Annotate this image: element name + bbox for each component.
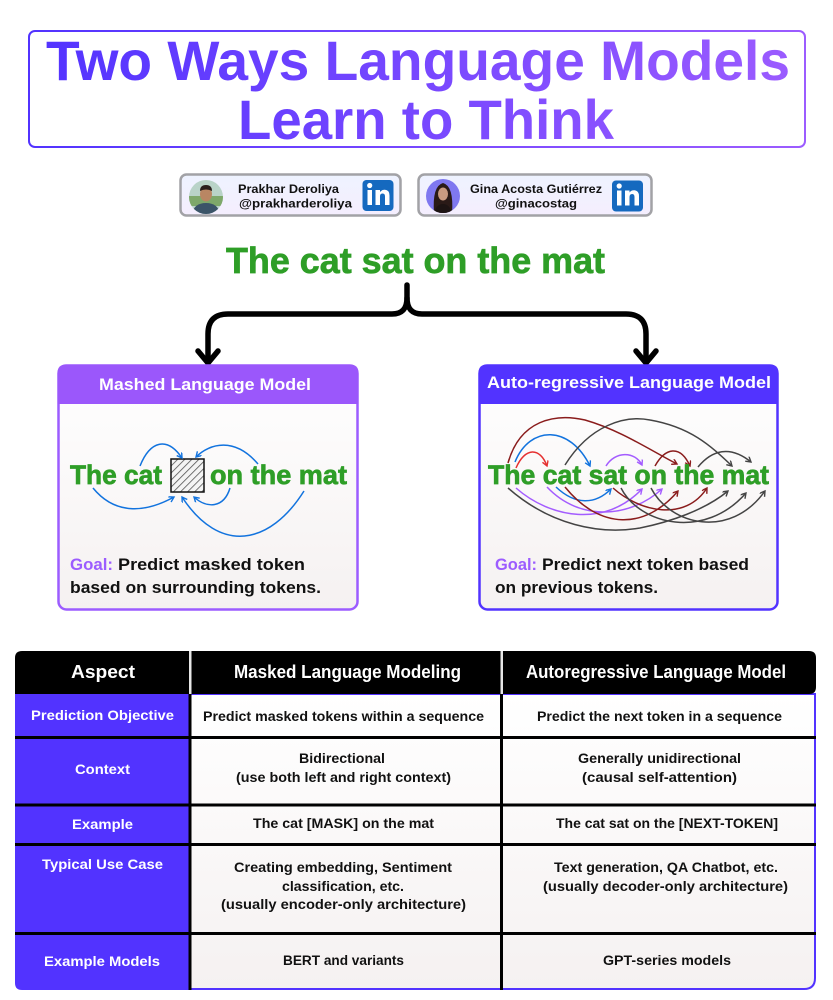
- title: Learn to Think: [238, 88, 615, 151]
- first column fill: [15, 690, 190, 990]
- table header: [15, 651, 816, 694]
- row: context: (causal self-attention): [582, 770, 737, 785]
- row: example models: GPT-series models: [603, 953, 731, 968]
- row: context: Generally unidirectional: [578, 751, 741, 766]
- panel header: [478, 364, 778, 404]
- goal text: Predict next token based: [542, 555, 749, 574]
- goal text: on previous tokens.: [495, 578, 658, 597]
- row: prediction objective: Prediction Objective: [31, 707, 174, 723]
- goal text: [495, 555, 749, 597]
- row: example models: [44, 953, 731, 969]
- panel header: [58, 364, 358, 404]
- row: prediction objective: Predict masked tokens within a sequence: [203, 709, 485, 724]
- row: typical use case: classification, etc.: [282, 879, 404, 894]
- row: example: The cat [MASK] on the mat: [253, 816, 435, 831]
- sentence arcs behind: [508, 418, 765, 530]
- goal text: Predict masked token: [118, 555, 305, 574]
- masked sentence: The cat: [70, 460, 162, 490]
- row: example: [72, 816, 778, 832]
- row: example models: BERT and variants: [283, 953, 404, 968]
- comparison table: [15, 651, 816, 990]
- icon: LinkedIn: [612, 180, 643, 212]
- row: context: Bidirectional: [299, 751, 385, 766]
- panel: masked language model: [58, 364, 358, 610]
- row: typical use case: Typical Use Case: [42, 856, 163, 872]
- author handle: @prakharderoliya: [239, 198, 353, 210]
- table header: Aspect: [71, 662, 135, 682]
- avatar: Gina: [426, 179, 460, 214]
- goal text: [70, 555, 321, 597]
- icon: LinkedIn: [362, 180, 394, 211]
- goal text: Goal:: [495, 555, 537, 574]
- title: [46, 29, 790, 151]
- row: prediction objective: Predict the next token in a sequence: [537, 709, 783, 724]
- author name: Gina Acosta Gutiérrez: [470, 184, 602, 196]
- goal text: Goal:: [70, 555, 113, 574]
- row: typical use case: (usually encoder-only architecture): [221, 897, 466, 912]
- author handle: @ginacostag: [495, 198, 577, 210]
- panel: autoregressive language model: [478, 364, 778, 610]
- panel header: Mashed Language Model: [99, 376, 311, 394]
- row: typical use case: Creating embedding, Sentiment: [234, 860, 453, 875]
- full sentence: The cat sat on the mat: [488, 460, 769, 490]
- author badge: Gina Acosta Gutiérrez: [418, 174, 652, 216]
- row: example models: Example Models: [44, 953, 160, 969]
- example sentence heading: The cat sat on the mat: [226, 240, 605, 281]
- table header: Masked Language Modeling: [234, 662, 461, 682]
- context arrows: [93, 444, 304, 536]
- masked sentence: on the mat: [210, 460, 347, 490]
- arrow: brace splitting to both models: [198, 285, 656, 363]
- table body background: [190, 694, 815, 989]
- row: prediction objective: [31, 707, 783, 724]
- row: example: Example: [72, 816, 133, 832]
- panel header: Auto-regressive Language Model: [487, 374, 771, 392]
- row: typical use case: (usually decoder-only architecture): [543, 879, 788, 894]
- row: typical use case: Text generation, QA Chatbot, etc.: [554, 860, 778, 875]
- author badge: Prakhar Deroliya: [180, 174, 400, 216]
- title box: [29, 29, 805, 151]
- row: context: (use both left and right context): [236, 770, 451, 785]
- row: typical use case: [42, 856, 788, 912]
- table header: Autoregressive Language Model: [526, 662, 786, 682]
- row: example: The cat sat on the [NEXT-TOKEN]: [556, 816, 778, 831]
- row: context: [75, 751, 741, 785]
- row: context: Context: [75, 761, 130, 777]
- avatar: Prakhar: [189, 180, 223, 214]
- title: Two Ways Language Models: [46, 29, 790, 92]
- masked sentence: [70, 459, 347, 492]
- author name: Prakhar Deroliya: [238, 184, 340, 196]
- goal text: based on surrounding tokens.: [70, 578, 321, 597]
